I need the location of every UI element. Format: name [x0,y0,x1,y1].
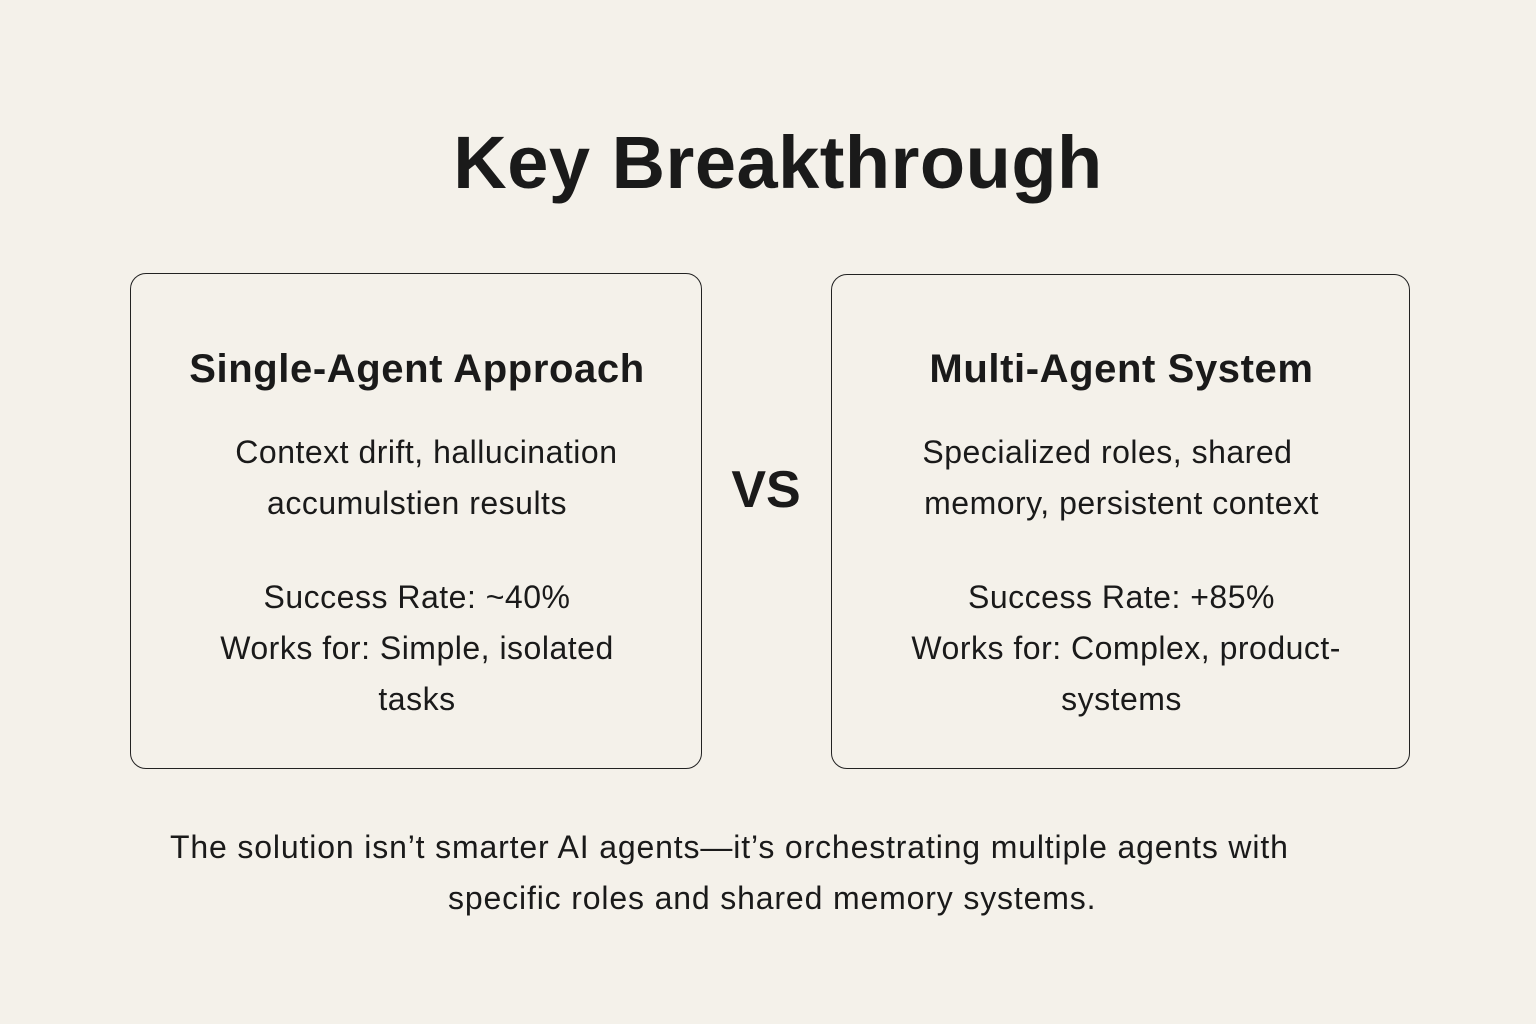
text: multi-agent stats: Works for: Complex, product- [911,630,1341,666]
text: single-agent stats: Works for: Simple, isolated [220,630,614,666]
footer text [170,829,1289,916]
panel: single-agent [130,273,702,769]
text: single-agent stats [220,579,614,717]
text: multi-agent stats [911,579,1341,717]
title: Key Breakthrough [453,121,1103,204]
text: single-agent description [235,434,617,521]
text: single-agent stats: Success Rate: ~40% [264,579,570,615]
text: single-agent description: Context drift, hallucination [235,434,617,470]
heading: multi-agent: Multi-Agent System [929,347,1314,391]
text: single-agent stats: tasks [378,681,456,717]
footer text: The solution isn’t smarter AI agents—it’s orchestrating multiple agents with [170,829,1289,865]
text: multi-agent description: memory, persistent context [924,485,1319,521]
panel: multi-agent [831,274,1410,769]
heading: single-agent: Single-Agent Approach [189,347,645,391]
vs label: VS [731,461,801,519]
text: multi-agent description: Specialized roles, shared [922,434,1292,470]
text: multi-agent description [922,434,1319,521]
text: multi-agent stats: Success Rate: +85% [968,579,1275,615]
text: single-agent description: accumulstien results [267,485,567,521]
footer text: specific roles and shared memory systems. [448,880,1096,916]
text: multi-agent stats: systems [1061,681,1182,717]
